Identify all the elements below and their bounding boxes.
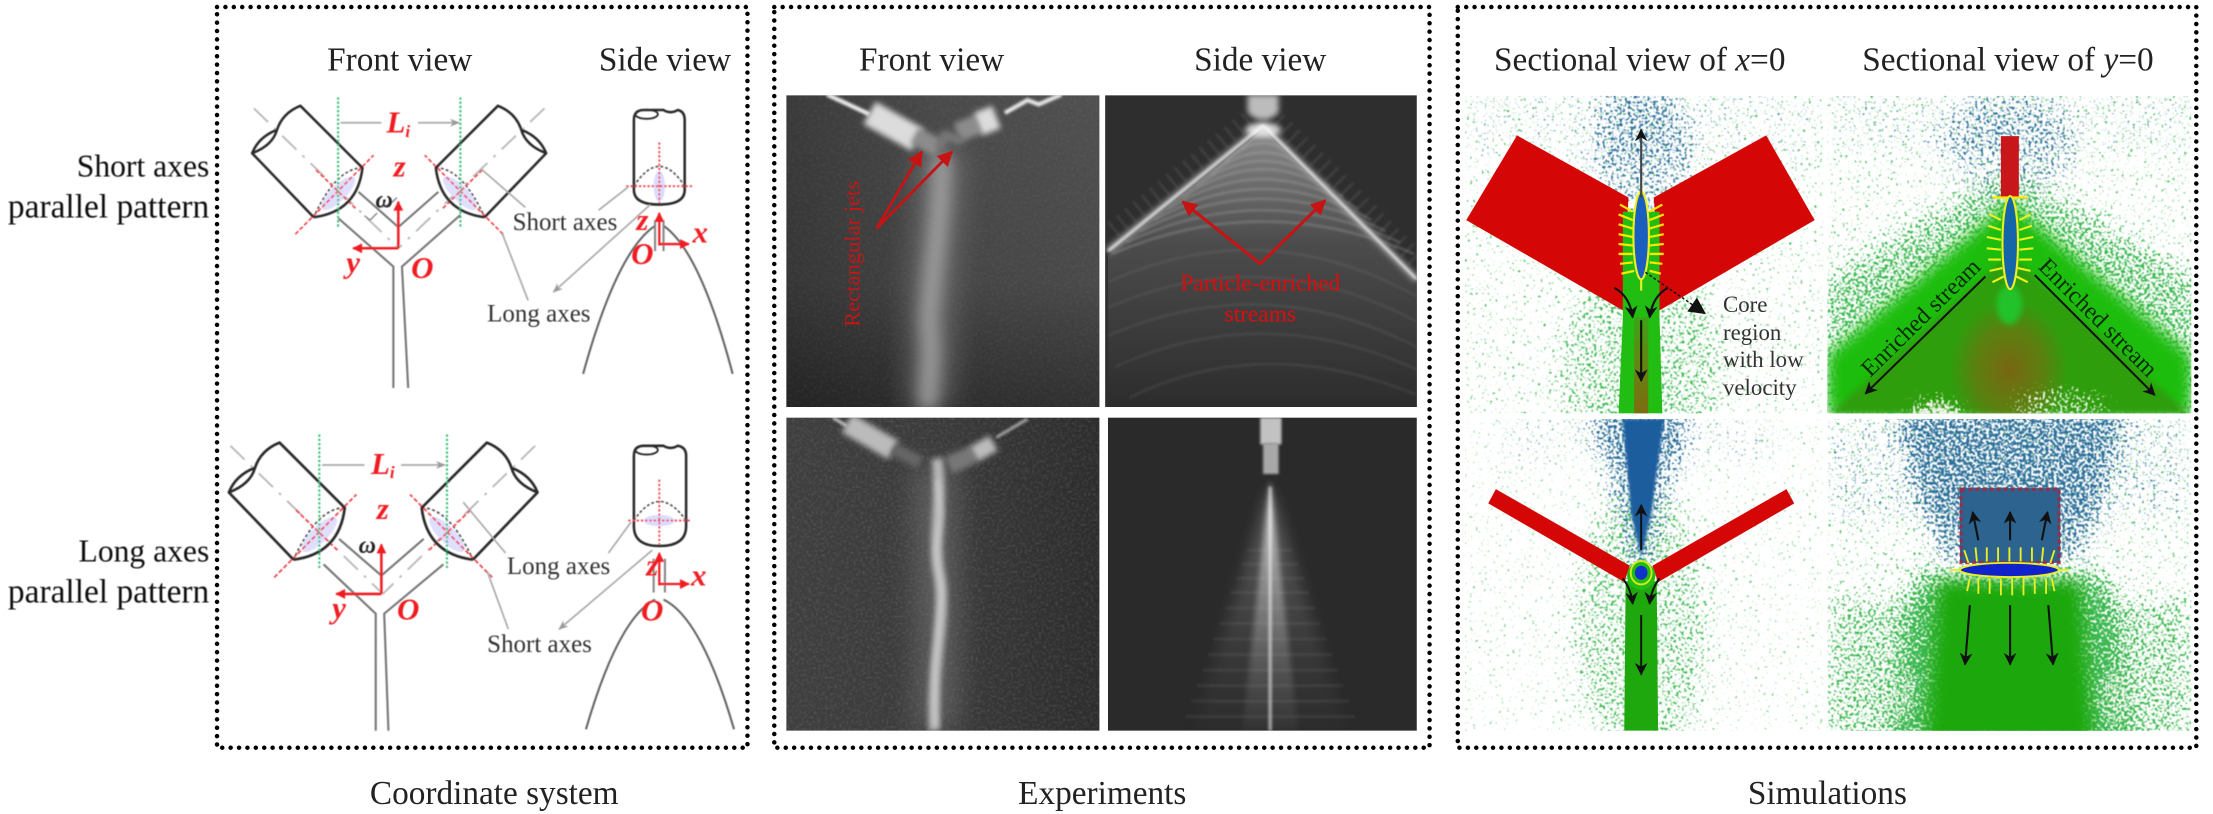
heading: side view: Side view xyxy=(599,42,731,79)
diagram: short axes front view: L xyxy=(386,105,405,140)
annotation: particle-enriched streams xyxy=(1180,200,1340,328)
diagram: short axes front view: y xyxy=(342,244,360,279)
scatter: blue spray xyxy=(1827,402,2191,564)
row label: long axes parallel pattern: Long axes xyxy=(79,533,209,568)
callout text: core region with low velocity: region xyxy=(1723,320,1782,345)
photo: short axes front view xyxy=(786,95,1099,409)
scatter: blue droplets above xyxy=(1827,85,2191,207)
diagram: long axes side view xyxy=(586,446,734,729)
diagram: long axes front view: O xyxy=(397,591,419,626)
simulation: short axes, x=0 xyxy=(1464,96,1824,414)
blue upward stream xyxy=(1623,419,1664,557)
heading: side view: Side view xyxy=(1194,42,1326,79)
heading: front view: Front view xyxy=(327,42,472,79)
diagram: short axes front view: i xyxy=(405,122,410,141)
panel: experiments xyxy=(774,7,1430,748)
diagram: short axes side view: z xyxy=(635,202,648,237)
heading: sectional view of x=0: Sectional view of x=0 xyxy=(1494,42,1785,79)
diagram: long axes front view: y xyxy=(328,590,346,625)
enriched green stream xyxy=(1624,581,1658,731)
callouts: short and long axes, upper row xyxy=(482,169,650,328)
row label: short axes parallel pattern xyxy=(8,148,210,225)
bright green stream region xyxy=(1827,202,2191,413)
diagram: long axes side view: O xyxy=(641,593,663,628)
scatter: white gaps at base xyxy=(1901,380,2118,414)
caption: simulations: Simulations xyxy=(1748,775,1907,812)
callouts: short and long axes, lower row: Short axes xyxy=(487,631,592,658)
annotation: rectangular jets: Rectangular jets xyxy=(840,181,865,327)
callout arrow: core region xyxy=(1645,272,1705,313)
diagram: long axes front view: L xyxy=(371,446,390,481)
scatter: blue droplets above impingement xyxy=(1465,96,1822,212)
caption: experiments: Experiments xyxy=(1018,775,1186,812)
row label: short axes parallel pattern: parallel pattern xyxy=(8,188,210,225)
diagram: long axes side view: x xyxy=(690,557,707,592)
arrows: upward flow xyxy=(1973,512,2047,540)
caption: coordinate system: Coordinate system xyxy=(370,775,619,812)
panel: coordinate system xyxy=(217,7,747,748)
scatter: white gaps at base xyxy=(1888,667,2131,729)
simulation: long axes, y=0 xyxy=(1806,395,2213,762)
diagram: short axes front view xyxy=(252,97,546,388)
callout text: core region with low velocity: with low xyxy=(1723,347,1804,372)
arrow and label: left enriched stream: Enriched stream xyxy=(1856,254,1986,382)
annotation: particle-enriched streams: streams xyxy=(1225,302,1296,328)
diagram: long axes front view: i xyxy=(390,463,395,482)
callout text: core region with low velocity: Core xyxy=(1723,292,1767,317)
simulation: short axes, y=0 xyxy=(1827,96,2192,414)
impingement ellipse with velocity spikes xyxy=(1619,183,1664,291)
diagram: long axes front view xyxy=(229,435,538,731)
callouts: short and long axes, upper row: Long axes xyxy=(487,301,591,328)
simulation: long axes, x=0 xyxy=(1464,419,1824,731)
flow arrows xyxy=(1623,505,1660,674)
flow arrows xyxy=(1614,130,1668,381)
diagram: short axes front view: O xyxy=(411,250,433,285)
callouts: short and long axes, lower row: Long axes xyxy=(507,553,610,580)
diagram: short axes side view xyxy=(583,110,733,374)
diagram: short axes front view: ω xyxy=(376,187,393,213)
enriched stream core xyxy=(1619,212,1662,413)
diagram: short axes side view: O xyxy=(631,236,654,271)
scatter: green spray dome xyxy=(1827,96,2192,414)
diagram: short axes front view: z xyxy=(393,148,406,183)
dense green region xyxy=(1925,581,2094,748)
heading: front view: Front view xyxy=(859,42,1004,79)
scatter: sparse green droplets xyxy=(1464,419,1824,731)
panel: simulations xyxy=(1439,7,2213,769)
row label: short axes parallel pattern: Short axes xyxy=(77,148,209,183)
impingement ring xyxy=(1627,561,1655,590)
impingement ellipse with velocity spikes xyxy=(1950,547,2069,595)
red jets xyxy=(1488,489,1794,582)
arrows: downward flow xyxy=(1965,605,2053,664)
annotation: particle-enriched streams: Particle-enriched xyxy=(1180,271,1340,297)
red jet xyxy=(2001,136,2019,198)
callout text: core region with low velocity: velocity xyxy=(1723,375,1797,400)
red jets xyxy=(1466,135,1815,310)
arrow and label: right enriched stream: Enriched stream xyxy=(2033,254,2162,383)
jet cross section xyxy=(1960,488,2060,563)
scatter: sparse droplets xyxy=(1806,395,2213,762)
diagram: long axes front view: z xyxy=(376,491,389,526)
scatter: blue droplets xyxy=(1496,402,1778,571)
diagram: long axes front view: ω xyxy=(359,533,376,559)
row label: long axes parallel pattern xyxy=(8,533,210,610)
annotation: rectangular jets xyxy=(840,152,952,327)
photo: long axes front view xyxy=(786,418,1099,731)
diagram: long axes side view: z xyxy=(645,548,658,583)
heading: sectional view of y=0: Sectional view of y=0 xyxy=(1862,42,2154,79)
scatter: sparse green droplets xyxy=(1464,96,1824,414)
impingement ellipse with velocity spikes xyxy=(1987,196,2033,289)
callouts: short and long axes, lower row xyxy=(463,502,652,658)
photo: long axes side view xyxy=(1108,418,1417,731)
photo: short axes side view xyxy=(1105,95,1417,409)
callout text: core region with low velocity xyxy=(1723,292,1804,400)
callouts: short and long axes, upper row: Short axes xyxy=(513,209,617,236)
row label: long axes parallel pattern: parallel pattern xyxy=(8,573,210,610)
inner liquid sheet xyxy=(1830,254,2189,413)
diagram: short axes side view: x xyxy=(691,215,708,250)
